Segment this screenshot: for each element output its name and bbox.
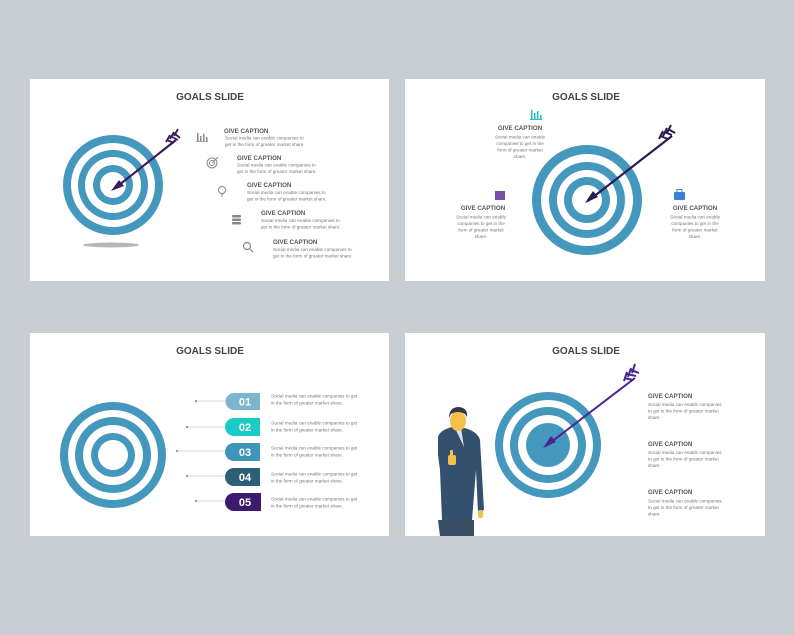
captions slide 4: to get in the form of greater market [648, 408, 719, 414]
target 3 [60, 402, 166, 508]
item 01: 01 [239, 396, 251, 408]
captions slide 1: GIVE CAPTION [237, 155, 282, 162]
caption left [456, 191, 506, 239]
title slide 2: GOALS SLIDE [552, 92, 620, 103]
caption top [495, 110, 545, 159]
captions slide 4: to get in the form of greater market [648, 505, 719, 510]
title slide 4: GOALS SLIDE [552, 346, 620, 357]
caption right: share. [689, 234, 701, 239]
captions slide 1 [196, 128, 353, 258]
captions slide 1: get in the form of greater market share. [261, 224, 341, 230]
caption top: Social media can enable [495, 134, 545, 140]
captions slide 4: share. [648, 512, 661, 516]
panel: slide 1 [30, 79, 389, 281]
numbered list [176, 393, 261, 511]
caption right: Social media can enable [670, 214, 720, 220]
captions slide 1: GIVE CAPTION [273, 239, 318, 246]
list texts: in the form of greater market share. [271, 452, 343, 458]
caption left: companies to get in the [457, 221, 505, 226]
list texts: Social media can enable companies to get [271, 446, 358, 450]
shadow [83, 242, 139, 248]
caption left: form of greater market [458, 228, 504, 232]
icon: magnifier [244, 242, 253, 252]
target 1 [63, 135, 163, 235]
caption top: share. [514, 154, 526, 159]
list texts: in the form of greater market share. [271, 428, 343, 432]
item 03: 03 [239, 447, 251, 459]
captions slide 4: Social media can enable companies [648, 498, 722, 504]
captions slide 1: GIVE CAPTION [247, 182, 292, 189]
arrow 1 [111, 129, 180, 191]
arrow 2 [585, 125, 675, 203]
captions slide 4: share. [648, 463, 661, 468]
caption left: GIVE CAPTION [461, 205, 506, 212]
caption top: GIVE CAPTION [498, 125, 543, 132]
caption right [670, 190, 720, 239]
icon: briefcase [674, 190, 685, 200]
caption top: companies to get in the [496, 141, 544, 146]
target 4 [495, 392, 601, 498]
caption right: companies to get in the [671, 221, 719, 226]
caption right: form of greater market [672, 228, 718, 232]
list texts: Social media can enable companies to get [271, 420, 358, 426]
icon: database [232, 215, 241, 224]
captions slide 4: GIVE CAPTION [648, 489, 693, 496]
list texts [271, 394, 358, 508]
arrow 4 [543, 364, 639, 448]
list texts: in the form of greater market share. [271, 478, 343, 484]
captions slide 1: get in the form of greater market share. [247, 196, 327, 202]
captions slide 1: Social media can enable companies to [273, 247, 352, 252]
captions slide 1: get in the form of greater market share. [273, 254, 353, 258]
icon: bar chart [196, 133, 208, 142]
captions slide 4: GIVE CAPTION [648, 393, 693, 400]
captions slide 4: GIVE CAPTION [648, 441, 693, 448]
captions slide 1: get in the form of greater market share. [237, 169, 317, 174]
captions slide 1: get in the form of greater market share. [225, 142, 305, 147]
caption left: Social media can enable [456, 214, 506, 220]
icon: calendar [495, 191, 505, 200]
captions slide 4: Social media can enable companies [648, 450, 722, 455]
captions slide 1: Social media can enable companies to [261, 218, 340, 223]
list texts: Social media can enable companies to get [271, 394, 358, 398]
icon: teal chart [530, 110, 542, 120]
list texts: in the form of greater market share. [271, 504, 343, 508]
item 04: 04 [239, 472, 252, 484]
caption right: GIVE CAPTION [673, 205, 718, 212]
panel: slide 3 [30, 333, 389, 536]
icon: target [207, 157, 218, 168]
item 05: 05 [239, 497, 251, 509]
panel: slide 4 [405, 333, 765, 536]
item 02: 02 [239, 422, 251, 434]
list texts: Social media can enable companies to get [271, 496, 358, 502]
captions slide 1: Social media can enable companies to [237, 162, 316, 168]
captions slide 4 [648, 393, 722, 516]
target 2 [532, 145, 642, 255]
captions slide 4: Social media can enable companies [648, 402, 722, 407]
caption top: form of greater market [497, 148, 543, 152]
list texts: in the form of greater market share. [271, 400, 343, 406]
person [438, 407, 484, 536]
captions slide 4: share. [648, 415, 661, 420]
captions slide 1: GIVE CAPTION [224, 128, 269, 135]
panel: slide 2 [405, 79, 765, 281]
icon: bulb [218, 186, 226, 196]
caption left: share. [475, 234, 487, 239]
captions slide 4: to get in the form of greater market [648, 456, 719, 462]
captions slide 1: GIVE CAPTION [261, 210, 306, 217]
title slide 3: GOALS SLIDE [176, 346, 244, 357]
list texts: Social media can enable companies to get [271, 472, 358, 476]
captions slide 1: Social media can enable companies to [247, 190, 326, 195]
title slide 1: GOALS SLIDE [176, 92, 244, 103]
captions slide 1: Social media can enable companies to [225, 136, 304, 140]
